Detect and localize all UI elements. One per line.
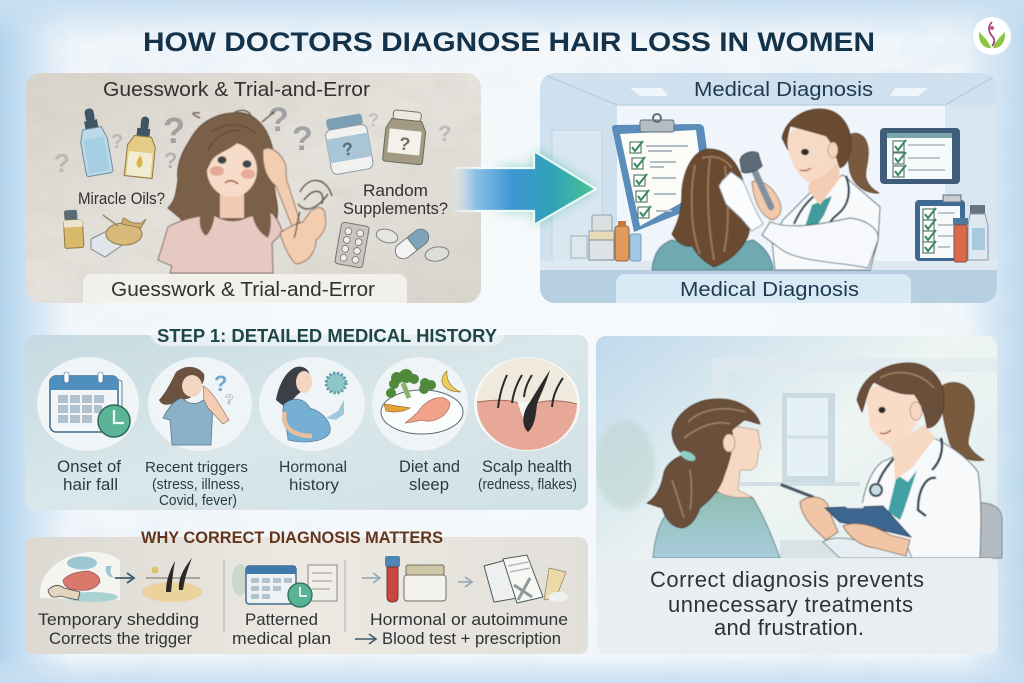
icon: supplement jar blue: ?: [341, 138, 355, 160]
chair: [978, 503, 1002, 558]
heading: step 1: STEP 1: DETAILED MEDICAL HISTORY: [157, 326, 497, 346]
pink t-shirt: [158, 213, 282, 273]
question marks: ?: [368, 110, 379, 130]
icon: left medicine jars: [571, 215, 641, 261]
label: random supplements: Supplements?: [343, 199, 448, 218]
label: recent triggers: Covid, fever): [159, 492, 237, 509]
white glove: [719, 172, 763, 231]
icon: supplement jar tan: ?: [398, 133, 411, 155]
icon: oil dish: [103, 215, 146, 245]
icon: stressed woman: ?: [225, 391, 234, 407]
neck and face: [716, 425, 761, 498]
panel: correct diagnosis consultation: [595, 336, 1002, 654]
heading: guesswork top: Guesswork & Trial-and-Error: [103, 79, 370, 101]
mouth: [225, 181, 238, 184]
icon: stressed woman: [148, 357, 252, 451]
scrubs: [888, 470, 917, 520]
icon: calendar plan: [232, 564, 337, 607]
label: onset of hair fall: Onset of: [57, 458, 121, 476]
question marks: ?: [292, 120, 313, 158]
panel background: [25, 335, 588, 510]
ponytail and hair: [647, 399, 760, 528]
title: HOW DOCTORS DIAGNOSE HAIR LOSS IN WOMEN: [143, 27, 875, 57]
panel: why correct diagnosis matters: [25, 529, 588, 654]
pen: [782, 485, 813, 497]
icon: wall tablet: [880, 128, 960, 184]
hair: [857, 363, 944, 428]
label: hormonal or autoimmune: [355, 611, 568, 648]
coat sleeve arm: [762, 218, 878, 268]
label: patterned medical plan: medical plan: [232, 630, 331, 648]
white coat: [772, 175, 880, 270]
question marks: [54, 101, 451, 178]
caption card: and frustration.: [714, 615, 864, 640]
bangs: [206, 128, 260, 172]
question marks: ?: [54, 148, 70, 178]
face: [207, 143, 257, 197]
neck: [808, 158, 840, 205]
divider: [224, 560, 345, 632]
blush: [210, 166, 224, 176]
icon: pills: [375, 226, 450, 263]
panel background: [26, 73, 481, 303]
icon: stressed woman: ?: [214, 371, 227, 396]
fallen hair strands: [294, 180, 332, 238]
icon: small vial: [63, 210, 84, 248]
icon: doctor with clipboard: [782, 363, 1002, 558]
ponytail: [942, 382, 984, 460]
icon: patient from behind: [652, 149, 773, 270]
heading: why correct diagnosis matters: WHY CORRECT DIAGNOSIS MATTERS: [141, 529, 443, 547]
label: diet and sleep: [399, 458, 460, 494]
stethoscope: [878, 438, 942, 516]
arrow: from guesswork to diagnosis: [452, 150, 596, 225]
label: onset of hair fall: hair fall: [63, 476, 118, 494]
hair: [782, 109, 851, 168]
label: recent triggers: Recent triggers: [145, 459, 248, 476]
icon: temporary shedding scene: [40, 552, 134, 602]
icon: checklist clipboard: [612, 114, 714, 232]
label: temporary shedding: [38, 611, 199, 648]
caption tab: medical diagnosis: Medical Diagnosis: [680, 279, 859, 301]
icon: scalp cross-section: [474, 357, 580, 451]
icon: blister pack: [335, 222, 369, 268]
dermatoscope handle: [755, 172, 771, 207]
caption card: unnecessary treatments: [668, 592, 913, 617]
label: scalp health: Scalp health: [482, 458, 572, 476]
icon: soap bar: [91, 230, 124, 257]
icon: calendar and clock: [37, 357, 139, 451]
caption tab: guesswork: Guesswork & Trial-and-Error: [111, 279, 375, 301]
question marks: ?: [164, 148, 177, 173]
raised arm and hand on head: [263, 148, 300, 226]
panel: guesswork and trial-and-error: [26, 73, 481, 303]
label: hormonal or autoimmune: Blood test + prescription: [382, 630, 561, 648]
panel: medical diagnosis: [540, 73, 997, 303]
label: temporary shedding: Corrects the trigger: [49, 630, 193, 648]
icon: yellow dropper bottle: [124, 115, 158, 179]
front hair locks over shirt: [200, 198, 215, 236]
panel background: soft clinic: [595, 336, 997, 654]
icon: doctor with dermatoscope: [740, 109, 880, 270]
question marks: ?: [111, 131, 123, 153]
face: [786, 125, 838, 182]
label: miracle oils: Miracle Oils?: [78, 190, 165, 208]
stethoscope: [794, 176, 849, 236]
icon: supplement jar blue: [323, 113, 374, 175]
label: hormonal history: history: [289, 477, 339, 494]
clipboard: [825, 506, 911, 537]
icon: clinic logo: [973, 17, 1011, 55]
neck: [890, 425, 935, 480]
icon: supplement jar tan: [382, 109, 428, 165]
icon: hair follicles on scalp: [142, 558, 202, 602]
caption tab: medical diagnosis: [616, 274, 911, 303]
ear: [723, 434, 735, 452]
label: recent triggers: [145, 459, 248, 509]
label: scalp health: [478, 458, 577, 493]
question marks: ?: [163, 110, 185, 151]
scrubs: [803, 196, 832, 236]
dermatoscope head: [740, 152, 762, 173]
label: recent triggers: (stress, illness,: [152, 476, 244, 493]
sleeve: [823, 538, 912, 558]
hair behind: [168, 113, 278, 238]
label: patterned medical plan: [232, 611, 331, 648]
question marks: ?: [438, 121, 451, 146]
face: [866, 381, 920, 447]
icon: blood tube and bottle: [953, 205, 988, 262]
neck: [220, 188, 244, 218]
panel background: clinic room: [540, 73, 997, 303]
lower arm holding hair: [280, 208, 326, 264]
caption card: Correct diagnosis prevents: [650, 567, 924, 592]
white coat: [862, 438, 981, 558]
label: diet and sleep: Diet and: [399, 458, 460, 476]
writing hand: [800, 497, 838, 540]
eyes: [218, 156, 226, 164]
icon: prescription papers: [484, 555, 568, 603]
icon: patient side view: [647, 399, 780, 558]
caption tab: guesswork: [83, 274, 407, 303]
label: random supplements: Random: [363, 181, 428, 200]
label: hormonal history: [279, 459, 347, 494]
ponytail: [847, 133, 879, 193]
icon: woman with thinning hair: [158, 110, 332, 273]
label: onset of hair fall: [57, 458, 121, 494]
scrunchie: [679, 449, 697, 463]
label: hormonal or autoimmune: Hormonal or autoimmune: [370, 611, 568, 629]
icon: small clipboard: [915, 195, 965, 261]
heading: medical diagnosis top: Medical Diagnosis: [694, 79, 873, 101]
hand with scope: [752, 181, 781, 220]
label: scalp health: (redness, flakes): [478, 477, 577, 493]
icon: pregnant woman and virus: [259, 357, 365, 451]
panel: step 1 detailed medical history: [25, 326, 588, 510]
label: random supplements: [343, 181, 448, 218]
label: hormonal history: Hormonal: [279, 459, 347, 476]
label: patterned medical plan: Patterned: [245, 611, 318, 629]
question marks: ?: [268, 101, 289, 139]
caption card: [598, 558, 998, 654]
icon: diet and sleep plate: [372, 357, 468, 451]
panel background: [25, 537, 588, 654]
icon: blood tube and jar: [362, 556, 472, 602]
label: temporary shedding: Temporary shedding: [38, 611, 199, 629]
label: diet and sleep: sleep: [409, 476, 449, 494]
lower hand: [843, 524, 910, 556]
icon: blue dropper bottle: [75, 106, 113, 177]
